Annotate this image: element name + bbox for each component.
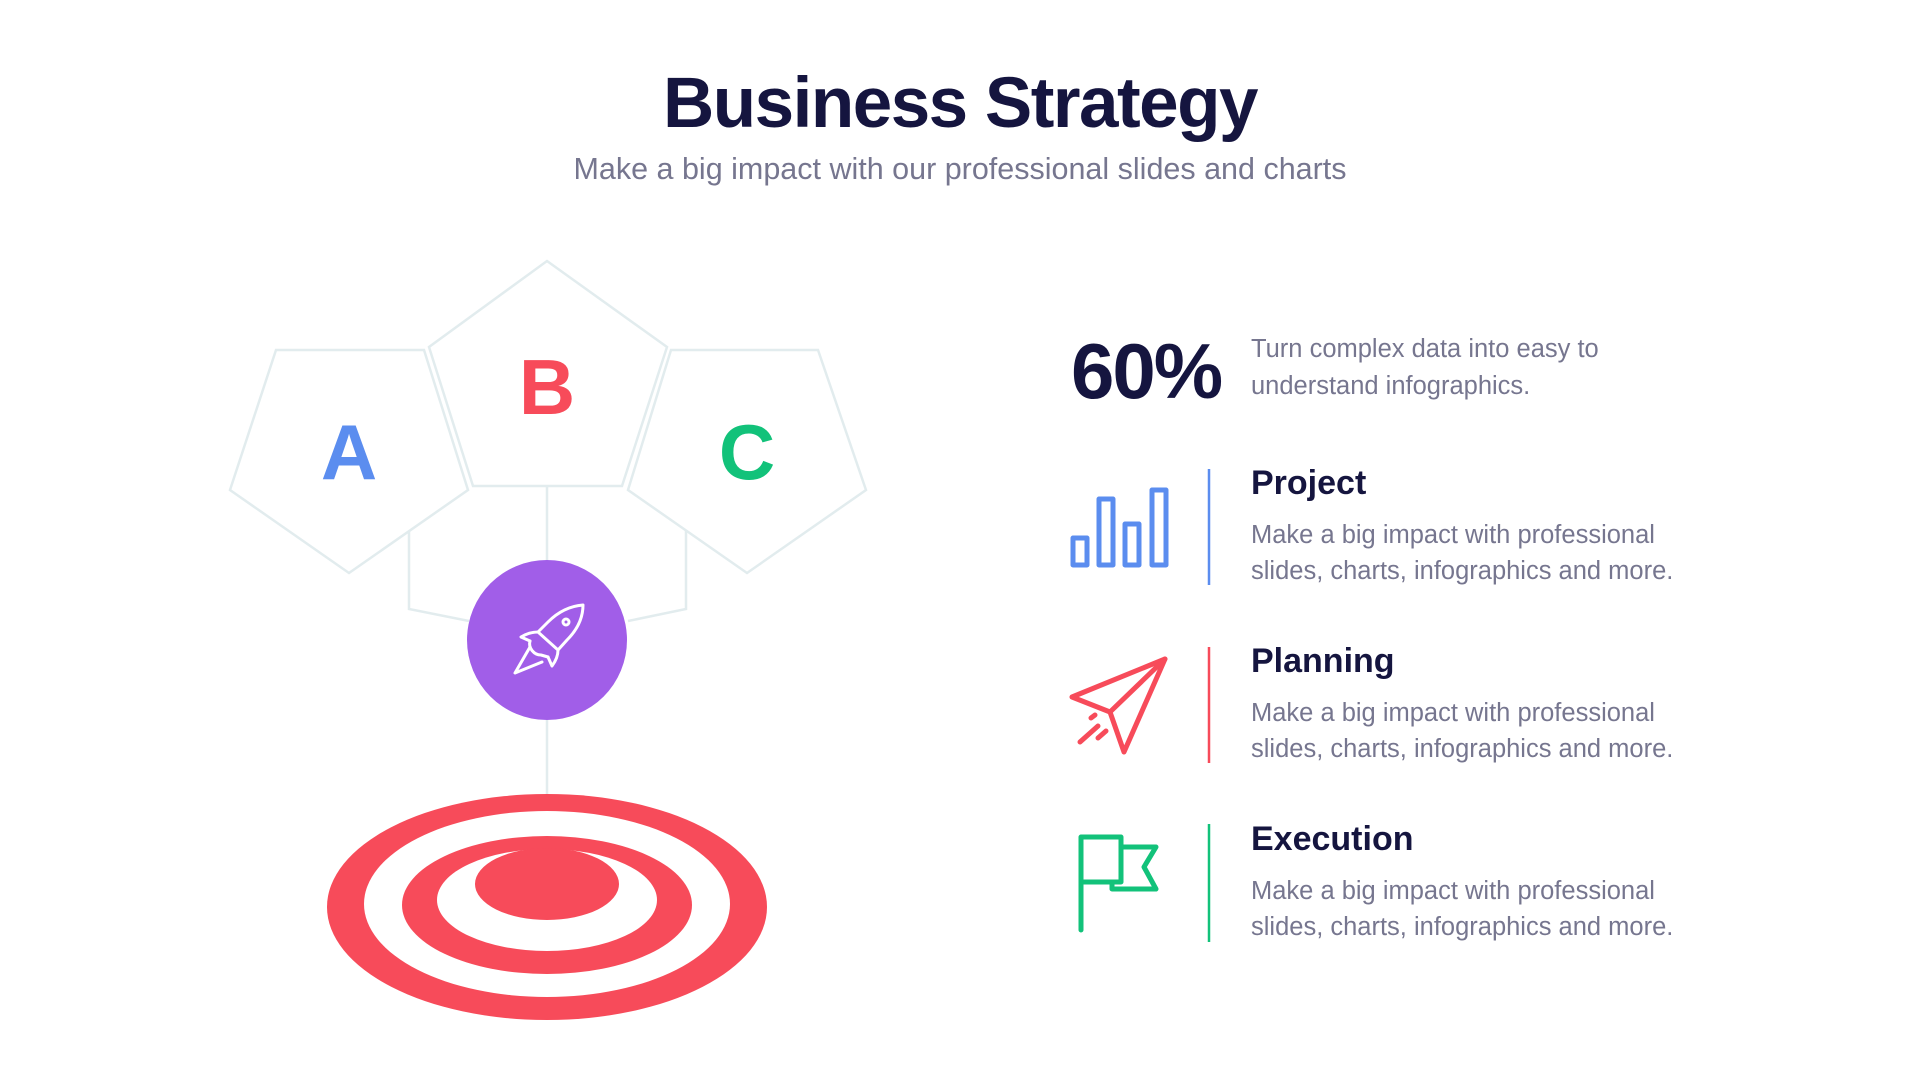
connectors — [409, 486, 686, 796]
item: Planning — [1072, 642, 1673, 763]
stat 60%: Turn complex data into easy to — [1251, 335, 1599, 363]
stat 60%: understand infographics. — [1251, 372, 1530, 400]
icon: rocket circle — [467, 560, 627, 720]
item: Execution: slides, charts, infographics and more. — [1251, 913, 1673, 941]
pentagon A — [230, 350, 468, 573]
item: Execution: Execution — [1251, 820, 1413, 858]
pentagon A: A — [321, 408, 377, 496]
item: Execution: Make a big impact with professional — [1251, 877, 1655, 905]
item: Execution — [1081, 820, 1673, 942]
pentagon B: B — [519, 343, 575, 431]
item: Planning: slides, charts, infographics and more. — [1251, 735, 1673, 763]
item: Project — [1073, 464, 1673, 585]
pentagon C — [628, 350, 866, 573]
item: Project: Project — [1251, 464, 1366, 502]
subtitle: Make a big impact with our professional slides and charts — [573, 152, 1347, 186]
item: Project: slides, charts, infographics and more. — [1251, 557, 1673, 585]
pentagon C: C — [719, 408, 775, 496]
item: Planning: Planning — [1251, 642, 1395, 680]
item: Planning: Make a big impact with professional — [1251, 699, 1655, 727]
target — [327, 794, 767, 1020]
item: Project: Make a big impact with professional — [1251, 521, 1655, 549]
pentagon B — [429, 261, 667, 486]
stat 60%: 60% — [1071, 327, 1222, 415]
title: Business Strategy — [663, 64, 1259, 143]
stat 60% — [1071, 327, 1599, 415]
